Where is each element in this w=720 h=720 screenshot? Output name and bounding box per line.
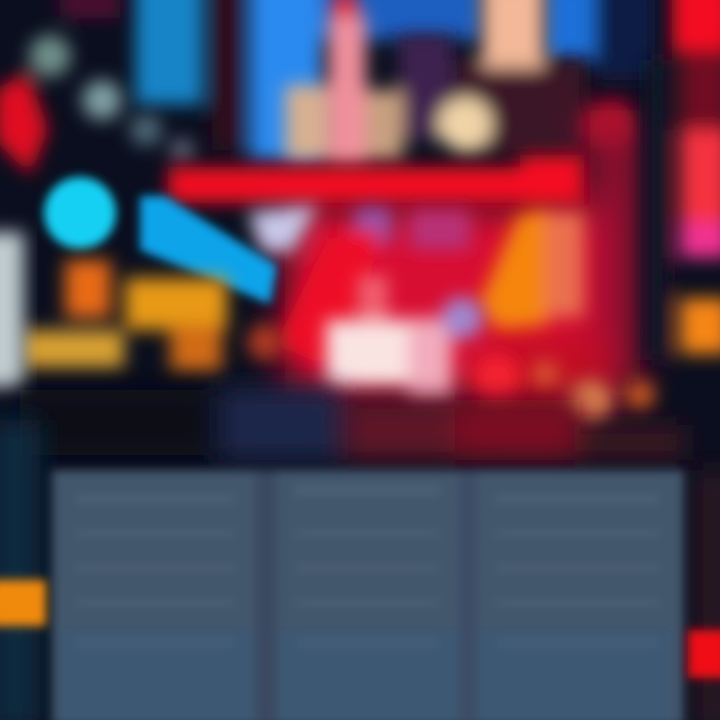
red mid-zone glow [285,110,640,410]
orange and gold signs left [22,260,283,371]
lower left teal edge [0,420,40,720]
info panel text rows, blurred [75,485,660,646]
cyan signs [44,177,277,304]
pale and purple lights below banner [248,205,470,365]
info panel [52,470,684,720]
left pale strip [0,232,24,387]
upper background sign: blue panels [135,0,655,160]
bottom right red light [688,630,720,678]
bottom edge orange light [0,580,46,626]
lower right edge [695,470,720,720]
left dots and red sign [0,0,194,175]
dark street band [20,388,685,460]
orange signs right [478,208,655,424]
upper centre: tower and lights [285,0,634,165]
white centre block [326,275,521,402]
red banner [168,155,584,205]
right neon signs [645,0,720,360]
